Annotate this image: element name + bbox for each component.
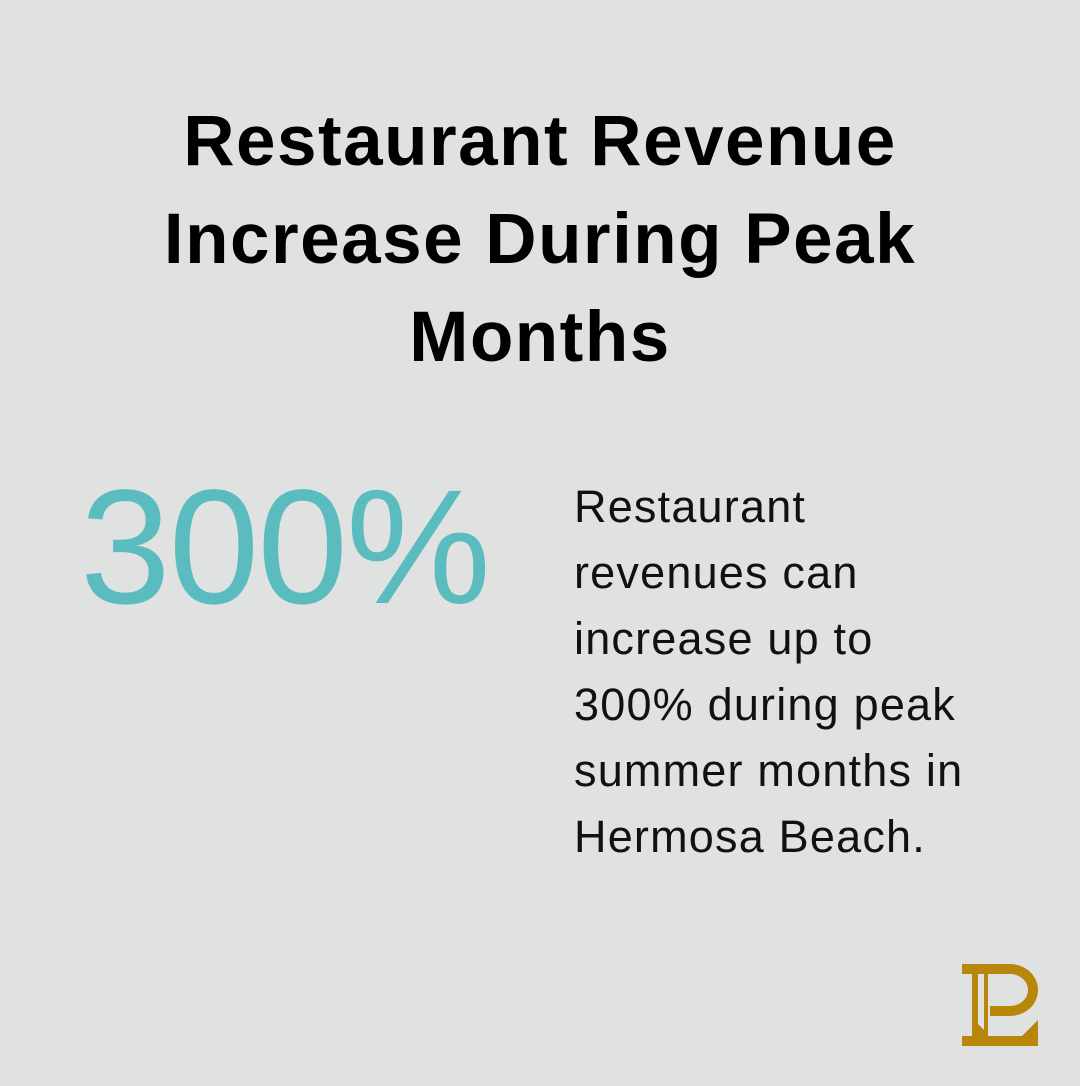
description text: increase up to [574,613,873,664]
description text: summer months in [574,745,963,796]
description text: Hermosa Beach. [574,811,926,862]
description text: revenues can [574,547,859,598]
big stat: 300% [80,455,489,638]
description text: Restaurant [574,481,806,532]
title [164,102,916,377]
icon: logo [962,964,1038,1046]
title: Months [409,298,671,377]
description text: 300% during peak [574,679,956,730]
title: Increase During Peak [164,200,916,279]
title: Restaurant Revenue [183,102,897,181]
description text [574,481,963,862]
